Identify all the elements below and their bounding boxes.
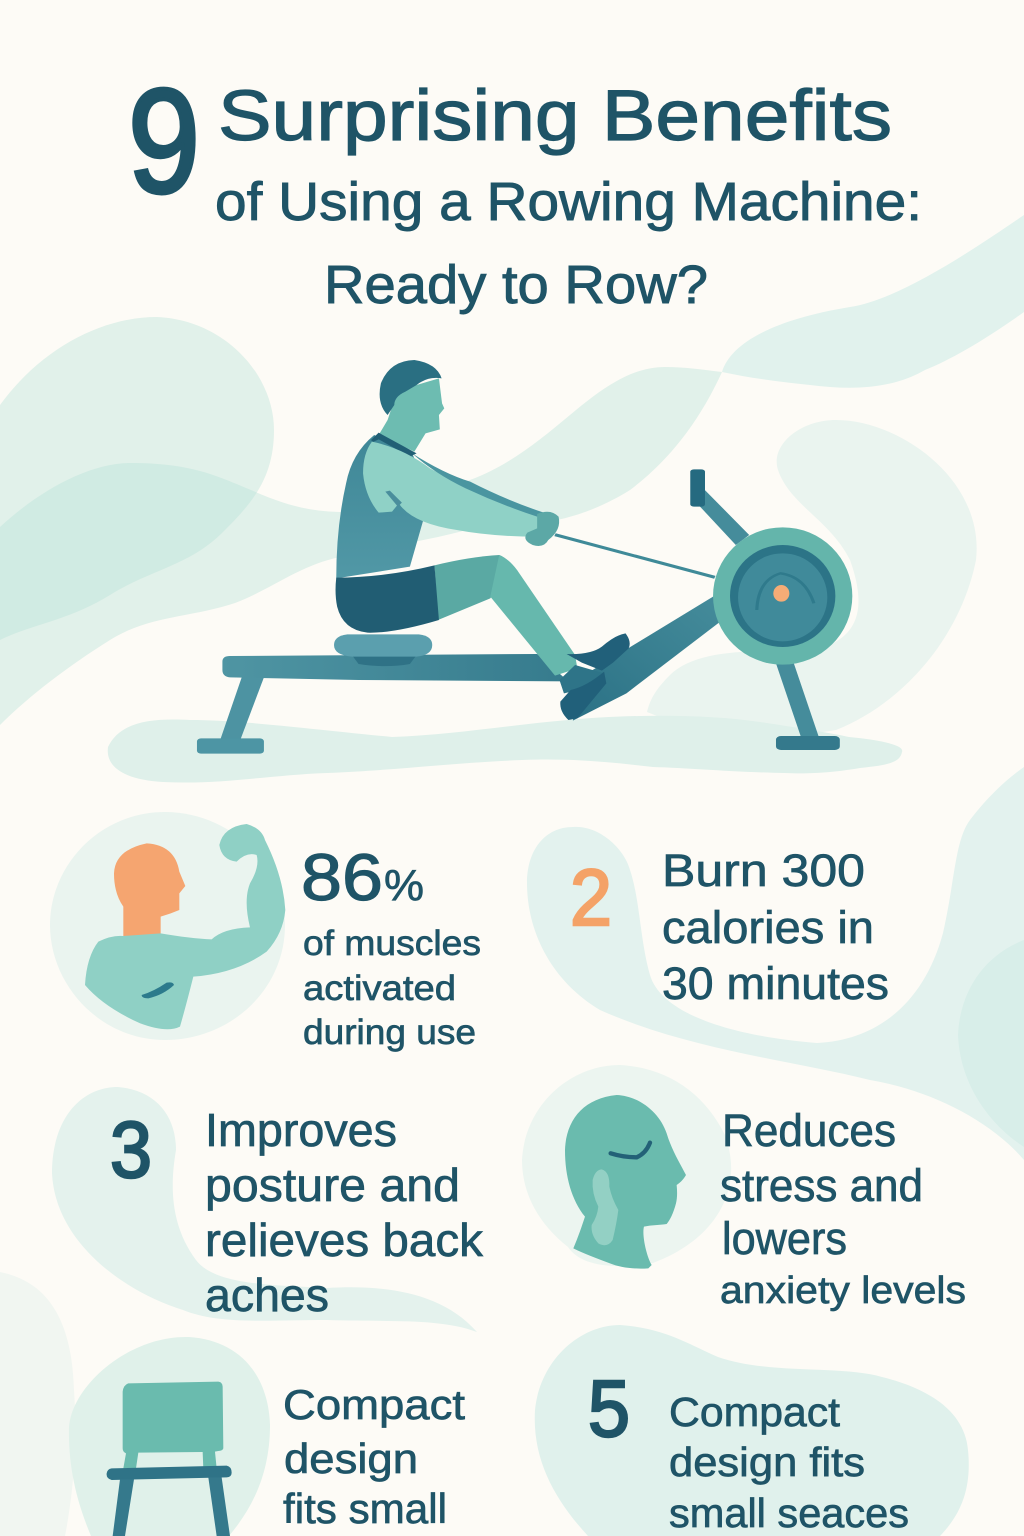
number 5: 5 — [588, 1364, 630, 1453]
text: compact design fits: small seaces — [669, 1490, 909, 1536]
head and neck — [371, 360, 444, 457]
text: compact design: Compact — [283, 1381, 465, 1428]
panel: benefit 3 posture — [110, 1104, 484, 1321]
text: posture: aches — [205, 1269, 329, 1321]
stat: 86%: % — [384, 861, 424, 910]
stat: 86%: 86 — [301, 840, 383, 914]
icon: flexing arm figure — [85, 824, 285, 1029]
text: compact design — [283, 1381, 465, 1532]
seat — [334, 634, 432, 666]
back leg, shin — [434, 555, 577, 676]
cable — [555, 535, 715, 577]
rail — [222, 654, 568, 681]
title: line 3: Ready to Row? — [324, 255, 708, 315]
text: stress: Reduces — [722, 1105, 896, 1156]
stat: 86% — [301, 840, 424, 914]
text: posture: relieves back — [205, 1214, 484, 1266]
torso — [336, 435, 439, 578]
text: compact design fits — [669, 1389, 909, 1536]
text: muscles description: activated — [303, 969, 456, 1008]
rowing machine rear strut and handle post — [690, 469, 749, 545]
text: stress: anxiety levels — [720, 1270, 966, 1312]
text: compact design: fits small — [283, 1485, 447, 1532]
title: line 1: Surprising Benefits — [218, 77, 892, 156]
front leg and foot — [197, 675, 265, 754]
text: muscles description — [303, 924, 481, 1052]
panel: benefit 4 stress — [565, 1095, 966, 1312]
title: line 2: of Using a Rowing Machine: — [215, 172, 922, 232]
text: posture — [205, 1104, 484, 1321]
number 3: 3 — [110, 1105, 152, 1194]
text: calories: Burn 300 — [662, 845, 865, 896]
text: stress — [720, 1105, 966, 1312]
icon: calm head — [565, 1095, 686, 1269]
text: stress: stress and — [720, 1160, 923, 1211]
panel: benefit 1 muscles — [85, 824, 481, 1052]
text: muscles description: of muscles — [303, 924, 481, 963]
text: stress: lowers — [722, 1213, 847, 1264]
text: posture: Improves — [205, 1104, 397, 1156]
text: muscles description: during use — [303, 1013, 476, 1052]
icon: chair — [107, 1382, 232, 1536]
text: compact design fits: design fits — [669, 1439, 865, 1485]
shorts — [336, 565, 439, 633]
shoes — [559, 633, 630, 720]
number 2: 2 — [570, 853, 612, 942]
main frame beam — [573, 595, 722, 721]
rear leg and foot — [776, 663, 840, 750]
title — [128, 59, 922, 315]
panel: benefit compact chair — [107, 1381, 465, 1536]
illustration: person on rowing machine — [197, 360, 852, 754]
text: calories: calories in — [662, 902, 874, 953]
hands — [525, 512, 559, 546]
title: big numeral 9: 9 — [128, 59, 200, 224]
text: posture: posture and — [205, 1159, 460, 1211]
text: compact design fits: Compact — [669, 1389, 841, 1435]
panel: benefit 2 calories — [570, 845, 889, 1009]
flywheel — [713, 527, 852, 665]
arm — [363, 442, 544, 537]
text: compact design: design — [284, 1435, 418, 1482]
text: calories — [662, 845, 889, 1009]
panel: benefit 5 compact — [588, 1364, 909, 1536]
text: calories: 30 minutes — [662, 958, 889, 1009]
